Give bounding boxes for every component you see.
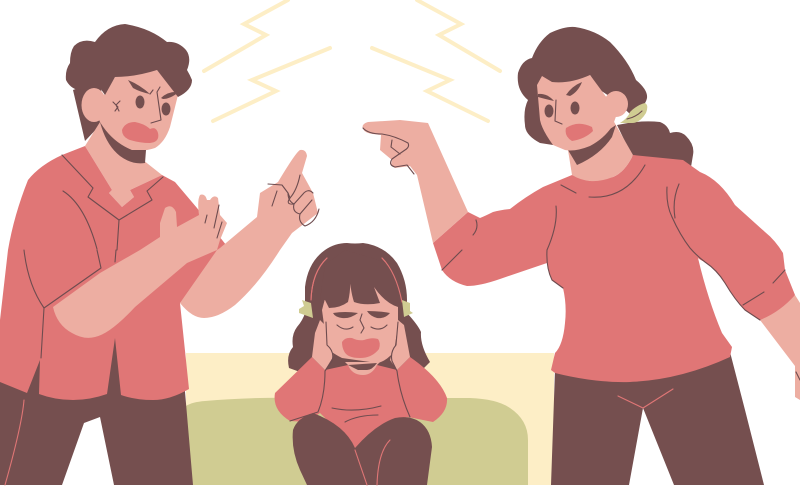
man: mouth: [122, 122, 158, 143]
lightning bolts: [204, 0, 500, 121]
girl: sweater: [275, 357, 447, 448]
woman: trouser seam: [618, 389, 673, 408]
woman: trousers: [551, 352, 764, 485]
man: neck: [85, 122, 162, 207]
woman: neck: [568, 120, 633, 181]
woman: ear: [604, 91, 628, 117]
girl: under-chin shadow: [348, 363, 377, 370]
sofa: [186, 353, 554, 485]
woman: pointing hand lines: [363, 128, 414, 174]
girl: left hand: [312, 320, 333, 370]
girl: hand and sweater lines: [290, 322, 410, 422]
man: nose and anger mark lines: [113, 87, 161, 123]
girl: leg seams: [355, 440, 390, 485]
girl: eyebrows: [333, 311, 390, 318]
woman: neck shadow: [568, 125, 616, 165]
woman: eyes and brows: [538, 82, 582, 118]
man: chest hand finger lines: [205, 205, 222, 238]
woman: scrunchie: [620, 103, 647, 123]
woman: hair: [518, 27, 647, 145]
man: shirt collar lines: [24, 155, 163, 358]
man: ear: [82, 88, 106, 122]
girl: legs: [293, 413, 432, 485]
man: eyes and brows: [128, 80, 179, 116]
girl: hair: [288, 243, 430, 372]
man: trouser seam: [5, 400, 24, 485]
woman: ponytail: [617, 121, 693, 167]
woman: face: [537, 75, 620, 150]
girl: hair highlights: [311, 258, 402, 302]
man: pointing arm: [180, 150, 318, 318]
woman: nose: [555, 100, 562, 124]
man: [0, 24, 319, 485]
man: shirt: [0, 146, 230, 400]
girl: right hand: [390, 320, 410, 370]
girl: neck: [345, 362, 380, 375]
girl: scrunchies: [299, 300, 413, 318]
girl: face: [322, 268, 398, 363]
girl: [275, 243, 447, 485]
girl: hair highlights over bangs: [311, 258, 402, 302]
man: beard: [100, 122, 146, 163]
girl: mouth: [342, 338, 380, 358]
woman: sweater lines: [442, 165, 785, 320]
woman: mouth: [566, 124, 593, 141]
girl: bangs: [320, 250, 405, 308]
man: pointing hand lines: [268, 175, 319, 226]
woman: far arm skin: [760, 295, 800, 400]
man: chest hand and forearm: [53, 195, 227, 338]
man: face: [95, 70, 178, 151]
woman: pointing arm and hand: [363, 120, 468, 243]
woman: far arm cuff line: [796, 372, 800, 380]
woman: sweater: [433, 155, 795, 382]
man: back hair: [73, 80, 105, 141]
man: trousers: [0, 330, 193, 485]
girl: closed eyes and nose: [337, 314, 387, 333]
man: hair: [66, 24, 192, 97]
woman: [363, 27, 800, 485]
